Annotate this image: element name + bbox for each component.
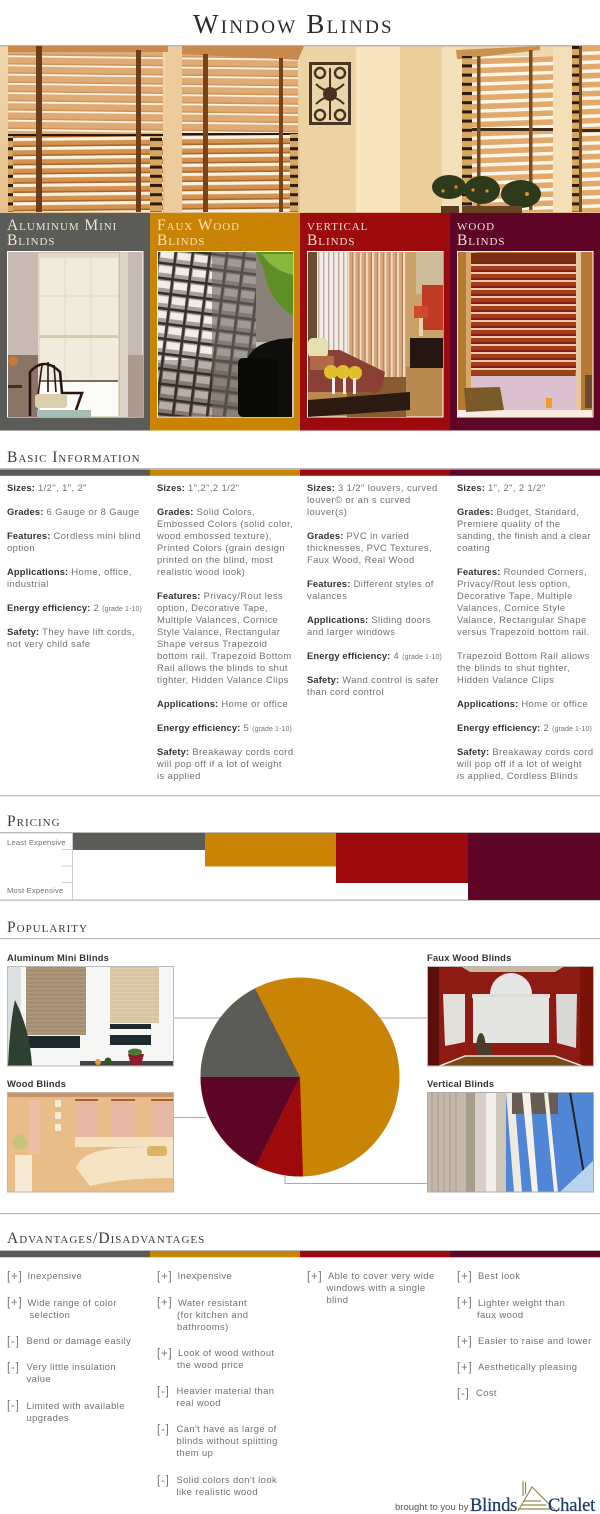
wall art bbox=[309, 62, 351, 125]
bar: faux wood bbox=[205, 833, 336, 866]
pros and cons: aluminum: Inexpensive bbox=[28, 1270, 82, 1281]
basic info: faux wood bbox=[156, 482, 294, 781]
pros and cons: faux wood: [-] bbox=[157, 1475, 170, 1487]
pros and cons: wood: [+] bbox=[457, 1271, 473, 1283]
pros and cons: vertical: blind bbox=[326, 1294, 348, 1305]
basic info: faux wood: Applications: Home or office bbox=[157, 698, 288, 709]
pros and cons: wood: [+] bbox=[457, 1297, 473, 1309]
basic info: aluminum: industrial bbox=[7, 578, 49, 589]
basic info: vertical: Faux Wood, Real Wood bbox=[307, 554, 415, 565]
footer credit and logo: brought to you by bbox=[395, 1502, 469, 1513]
pros and cons: aluminum: Limited with available bbox=[26, 1400, 125, 1411]
pros and cons: wood: Lighter weight than bbox=[478, 1297, 565, 1308]
panel: faux wood blinds bbox=[150, 213, 300, 430]
panel heading: vertical bbox=[307, 217, 368, 234]
basic info: wood: Premiere quality of the bbox=[457, 518, 560, 529]
bar: aluminum bbox=[73, 833, 205, 850]
basic info: wood: coating bbox=[457, 542, 490, 553]
basic info: wood: Applications: Home or office bbox=[457, 698, 588, 709]
basic info: faux wood: is applied bbox=[157, 770, 201, 781]
basic info: wood: Energy efficiency: 2 (grade 1-10) bbox=[457, 722, 592, 733]
section heading: popularity: Popularity bbox=[7, 919, 88, 936]
pros and cons: faux wood: [-] bbox=[157, 1424, 170, 1436]
basic info: vertical bbox=[307, 482, 442, 697]
basic info: vertical: valances bbox=[307, 590, 347, 601]
basic info: vertical: and larger windows bbox=[307, 626, 395, 637]
pros and cons: aluminum: Very little insulation bbox=[26, 1361, 116, 1372]
pros and cons: faux wood: them up bbox=[176, 1447, 213, 1458]
basic info: aluminum: option bbox=[7, 542, 35, 553]
basic info: faux wood: Printed Colors (grain design bbox=[157, 542, 285, 553]
pros and cons: faux wood: Heavier material than bbox=[176, 1385, 274, 1396]
basic info: faux wood: Features: Privacy/Rout less bbox=[157, 590, 283, 601]
pros and cons: faux wood: Inexpensive bbox=[178, 1270, 232, 1281]
pros and cons: wood: Cost bbox=[476, 1387, 497, 1398]
photo: vertical blinds with sofa bbox=[307, 251, 444, 418]
basic info: wood: Valance, Rectangular Shape bbox=[457, 614, 587, 625]
pros and cons: wood: faux wood bbox=[477, 1309, 524, 1320]
basic info: wood: Valances, Cornice Style bbox=[457, 602, 566, 613]
basic info: wood: is applied, Cordless Blinds bbox=[457, 770, 578, 781]
panel heading: Aluminum Mini bbox=[7, 217, 117, 234]
window 4 bbox=[572, 46, 600, 212]
pros and cons: aluminum: selection bbox=[30, 1309, 70, 1320]
pros and cons: wood: [-] bbox=[457, 1388, 470, 1400]
pros and cons: wood: [+] bbox=[457, 1336, 473, 1348]
window 2 bbox=[182, 46, 304, 212]
window 1 bbox=[8, 46, 168, 212]
pros and cons: faux wood: real wood bbox=[176, 1397, 221, 1408]
basic info: faux wood: Energy efficiency: 5 (grade 1-10) bbox=[157, 722, 292, 733]
panel heading: Blinds bbox=[457, 232, 505, 249]
basic info: faux wood: Embossed Colors (solid color, bbox=[157, 518, 293, 529]
pros and cons: aluminum: [-] bbox=[7, 1362, 20, 1374]
pros and cons: aluminum: [+] bbox=[7, 1297, 23, 1309]
callout: faux wood blinds: Faux Wood Blinds bbox=[427, 952, 511, 963]
basic info: wood: Privacy/Rout less option, bbox=[457, 578, 571, 589]
basic info: vertical: thicknesses, PVC Textures, bbox=[307, 542, 432, 553]
callout: aluminum mini blinds: Aluminum Mini Blinds bbox=[7, 952, 109, 963]
pros and cons: aluminum: value bbox=[26, 1373, 51, 1384]
photo: faux wood slats and leaf bbox=[157, 251, 294, 418]
basic info: aluminum bbox=[7, 482, 142, 649]
basic info: faux wood: printed on the blind, most bbox=[157, 554, 273, 565]
bar: wood bbox=[468, 833, 600, 900]
pros and cons: wood: [+] bbox=[457, 1362, 473, 1374]
basic info: faux wood: Safety: Breakaway cords cord bbox=[157, 746, 294, 757]
panel: vertical blinds bbox=[300, 213, 450, 430]
photo: wood blinds in window seat bbox=[457, 251, 594, 418]
basic info: vertical: Energy efficiency: 4 (grade 1-10) bbox=[307, 650, 442, 661]
panel heading: Blinds bbox=[157, 232, 205, 249]
axis label: most expensive: Most Expensive bbox=[7, 886, 63, 895]
basic info: wood: Trapezoid Bottom Rail allows bbox=[457, 650, 590, 661]
basic info: faux wood: Multiple Valances, Cornice bbox=[157, 614, 278, 625]
hero photo: wood blinds in a room bbox=[0, 45, 600, 213]
basic info: aluminum: Safety: They have lift cords, bbox=[7, 626, 135, 637]
basic info: aluminum: Energy efficiency: 2 (grade 1-10) bbox=[7, 602, 142, 613]
section heading: advantages and disadvantages: Advantages/Disadvantages bbox=[7, 1230, 205, 1247]
basic info: vertical: than cord control bbox=[307, 686, 384, 697]
pros and cons: faux wood: [+] bbox=[157, 1348, 173, 1360]
pros and cons: faux wood: Look of wood without bbox=[178, 1347, 274, 1358]
pros and cons: vertical bbox=[307, 1270, 435, 1305]
pros and cons: vertical: [+] bbox=[307, 1271, 323, 1283]
color bar bbox=[0, 468, 600, 476]
basic info: vertical: Grades: PVC in varied bbox=[307, 530, 409, 541]
window 3 bbox=[456, 46, 553, 212]
basic info: wood: Features: Rounded Corners, bbox=[457, 566, 587, 577]
basic info: wood: Hidden Valance Clips bbox=[457, 674, 554, 685]
basic info: wood: versus Trapezoid bottom rail. bbox=[457, 626, 590, 637]
basic info: faux wood: Style Valance, Rectangular bbox=[157, 626, 280, 637]
pros and cons: faux wood: Solid colors don't look bbox=[176, 1474, 277, 1485]
basic info: faux wood: Grades: Solid Colors, bbox=[157, 506, 255, 517]
pros and cons: aluminum: Bend or damage easily bbox=[26, 1335, 131, 1346]
pros and cons: faux wood: [+] bbox=[157, 1271, 173, 1283]
color bar bbox=[0, 1250, 600, 1257]
pros and cons: faux wood: [+] bbox=[157, 1297, 173, 1309]
photo: mini blinds with chair bbox=[7, 251, 144, 418]
basic info: wood: Decorative Tape, Multiple bbox=[457, 590, 573, 601]
basic info: vertical: Features: Different styles of bbox=[307, 578, 434, 589]
pros and cons: faux wood: (for kitchen and bbox=[177, 1309, 248, 1320]
pros and cons: aluminum: [-] bbox=[7, 1400, 20, 1412]
basic info: aluminum: Applications: Home, office, bbox=[7, 566, 132, 577]
pros and cons: wood: Aesthetically pleasing bbox=[478, 1361, 577, 1372]
basic info: vertical: louver(s) bbox=[307, 506, 347, 517]
basic info: wood bbox=[456, 482, 594, 781]
panel: wood blinds bbox=[450, 213, 600, 430]
pros and cons: faux wood bbox=[157, 1270, 278, 1497]
title: Window Blinds bbox=[193, 9, 394, 39]
pros and cons: wood bbox=[457, 1270, 592, 1400]
axis label: least expensive: Least Expensive bbox=[7, 838, 66, 847]
panel heading: Blinds bbox=[7, 232, 55, 249]
pros and cons: faux wood: Can't have as large of bbox=[176, 1423, 277, 1434]
basic info: faux wood: realistic wood look) bbox=[157, 566, 245, 577]
basic info: faux wood: wood embossed texture), bbox=[156, 530, 272, 541]
pros and cons: aluminum bbox=[7, 1270, 131, 1423]
panel heading: Blinds bbox=[307, 232, 355, 249]
basic info: faux wood: option, Decorative Tape, bbox=[157, 602, 268, 613]
pros and cons: wood: Best look bbox=[478, 1270, 520, 1281]
pros and cons: vertical: Able to cover very wide bbox=[328, 1270, 435, 1281]
logo: Blinds Chalet bbox=[470, 1481, 596, 1514]
section heading: basic information: Basic Information bbox=[7, 449, 141, 466]
basic info: aluminum: Grades: 6 Gauge or 8 Gauge bbox=[7, 506, 140, 517]
panel heading: wood bbox=[457, 217, 495, 234]
basic info: wood: the blinds to shut tighter, bbox=[457, 662, 570, 673]
pros and cons: faux wood: [-] bbox=[157, 1386, 170, 1398]
pros and cons: faux wood: bathrooms) bbox=[177, 1321, 229, 1332]
pros and cons: aluminum: Wide range of color bbox=[28, 1297, 117, 1308]
bar: vertical bbox=[336, 833, 468, 883]
pros and cons: faux wood: the wood price bbox=[177, 1359, 244, 1370]
basic info: wood: Safety: Breakaway cords cord bbox=[457, 746, 594, 757]
basic info: wood: Sizes: 1", 2", 2 1/2" bbox=[457, 482, 546, 493]
basic info: faux wood: Rail allows the blinds to shut bbox=[157, 662, 288, 673]
pros and cons: vertical: windows with a single bbox=[326, 1282, 425, 1293]
plants bbox=[432, 175, 541, 213]
footer credit and logo bbox=[395, 1481, 596, 1514]
pros and cons: aluminum: [+] bbox=[7, 1271, 23, 1283]
pros and cons: aluminum: [-] bbox=[7, 1336, 20, 1348]
panel: aluminum mini blinds bbox=[0, 213, 150, 430]
basic info: aluminum: Features: Cordless mini blind bbox=[7, 530, 141, 541]
pros and cons: wood: Easier to raise and lower bbox=[478, 1335, 592, 1346]
callout: aluminum mini blinds bbox=[7, 952, 175, 1067]
basic info: faux wood: tighter, Hidden Valance Clips bbox=[157, 674, 289, 685]
basic info: aluminum: not very child safe bbox=[7, 638, 91, 649]
basic info: wood: Grades: Budget, Standard, bbox=[457, 506, 579, 517]
wall panels bbox=[165, 47, 573, 212]
basic info: faux wood: Shape versus Trapezoid bbox=[157, 638, 267, 649]
basic info: faux wood: Sizes: 1",2",2 1/2" bbox=[157, 482, 240, 493]
basic info: aluminum: Sizes: 1/2", 1", 2" bbox=[7, 482, 87, 493]
pros and cons: faux wood: like realistic wood bbox=[176, 1486, 258, 1497]
connector lines bbox=[173, 1018, 427, 1184]
section heading: pricing: Pricing bbox=[7, 813, 61, 830]
pie chart bbox=[200, 978, 400, 1177]
basic info: vertical: Safety: Wand control is safer bbox=[307, 674, 439, 685]
basic info: vertical: Sizes: 3 1/2" louvers, curved bbox=[307, 482, 438, 493]
basic info: vertical: Applications: Sliding doors bbox=[307, 614, 431, 625]
basic info: wood: sanding, the finish and a clear bbox=[457, 530, 591, 541]
basic info: faux wood: bottom rail. Trapezoid Bottom bbox=[157, 650, 292, 661]
pros and cons: faux wood: blinds without splitting bbox=[176, 1435, 278, 1446]
basic info: faux wood: will pop off if a lot of weight bbox=[156, 758, 282, 769]
callout: wood blinds bbox=[7, 1078, 174, 1193]
panel heading: Faux Wood bbox=[157, 217, 240, 234]
callout: faux wood blinds bbox=[427, 952, 594, 1067]
pros and cons: faux wood: Water resistant bbox=[178, 1297, 247, 1308]
callout: wood blinds: Wood Blinds bbox=[7, 1078, 66, 1089]
pros and cons: aluminum: upgrades bbox=[26, 1412, 69, 1423]
callout: vertical blinds: Vertical Blinds bbox=[427, 1078, 494, 1089]
callout: vertical blinds bbox=[427, 1078, 594, 1193]
pricing chart bbox=[0, 832, 600, 901]
basic info: vertical: louver© or an s curved bbox=[307, 494, 411, 505]
basic info: wood: will pop off if a lot of weight bbox=[456, 758, 582, 769]
